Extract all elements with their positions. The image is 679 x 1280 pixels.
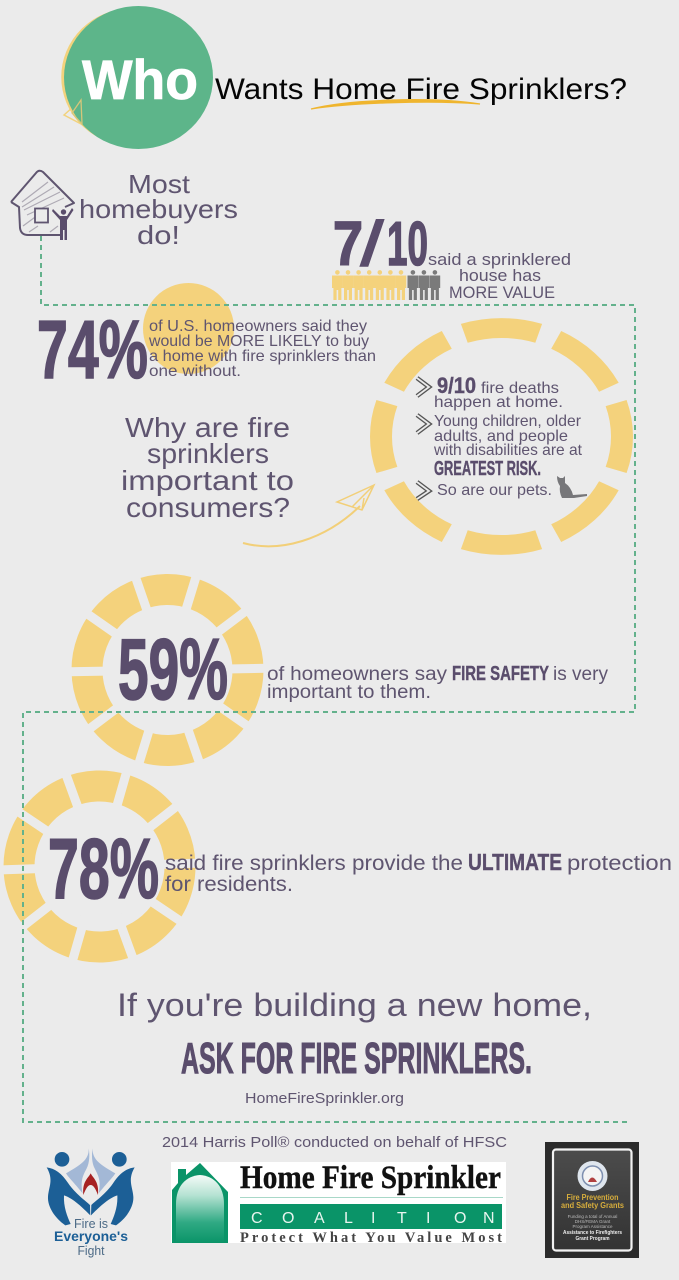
title accent shapes xyxy=(62,9,202,145)
icon: chevrons xyxy=(417,378,429,499)
text: more value: MORE VALUE xyxy=(449,283,555,302)
icon: cat xyxy=(557,476,587,498)
text: greatest risk: GREATEST RISK. xyxy=(434,458,541,480)
text: ultimate protection: protection xyxy=(567,852,672,875)
text: 74% description: of U.S. homeowners said they xyxy=(149,318,367,335)
heading: why are fire sprinklers important: important to xyxy=(121,465,294,496)
text: list copy: with disabilities are at xyxy=(433,442,583,459)
stat: 7/10: 10 xyxy=(387,210,428,279)
text: ultimate protection: said fire sprinklers provide the xyxy=(165,852,463,875)
stat: 9/10: 9/10 xyxy=(437,373,476,398)
heading: most homebuyers do: Most xyxy=(128,169,191,199)
text: 74% description: a home with fire sprinklers than xyxy=(149,348,376,365)
text: fire safety: FIRE SAFETY xyxy=(452,663,549,685)
stat: 74%: 74% xyxy=(37,303,148,396)
logo: grants plaque: Funding a total of Annual xyxy=(568,1214,617,1219)
logo: grants plaque: DHS/FEMA Grant xyxy=(575,1219,611,1224)
text: more value: said a sprinklered xyxy=(428,250,571,269)
stat: 59%: 59% xyxy=(118,622,228,718)
title xyxy=(62,6,627,149)
ring: top right xyxy=(381,328,622,545)
text: 74% description xyxy=(148,318,376,380)
logo: grants plaque: Assistance to Firefighters xyxy=(563,1230,622,1236)
text: list copy xyxy=(433,380,583,499)
text: fire safety: is very xyxy=(553,664,608,685)
heading: why are fire sprinklers important: Why are fire xyxy=(125,412,290,443)
logo: Home Fire Sprinkler Coalition: Protect What You Value Most xyxy=(240,1230,502,1246)
logo: grants plaque: Grant Program xyxy=(576,1236,610,1242)
heading: most homebuyers do: do! xyxy=(137,220,180,250)
icon: ten people xyxy=(332,270,440,300)
stat: 7/10 xyxy=(333,210,428,279)
stat: 78%: 78% xyxy=(48,822,159,917)
text: more value: house has xyxy=(459,266,541,285)
title green circle xyxy=(64,6,213,149)
logo: Fire is Everyone's Fight: Fight xyxy=(78,1243,105,1258)
logo: Fire is Everyone's Fight: Fire is xyxy=(74,1216,108,1231)
text: ultimate protection: for residents. xyxy=(165,873,293,896)
logo: Fire is Everyone's Fight: Everyone's xyxy=(54,1228,128,1244)
text: list copy: fire deaths xyxy=(481,380,559,397)
text: more value xyxy=(428,250,571,302)
heading: most homebuyers do: homebuyers xyxy=(79,194,238,224)
heading: why are fire sprinklers important xyxy=(121,412,294,523)
text: 74% description: one without. xyxy=(149,363,241,380)
text: ultimate protection xyxy=(165,849,672,896)
text: fire safety: important to them. xyxy=(267,682,431,703)
title word: Who: Who xyxy=(82,48,198,111)
text: fire safety: of homeowners say xyxy=(267,664,448,685)
heading: why are fire sprinklers important: consumers? xyxy=(126,492,290,523)
stat: 7/10: / xyxy=(361,210,384,279)
title swoosh xyxy=(311,100,480,109)
logo: grants plaque: and Safety Grants xyxy=(561,1201,625,1210)
text: 74% description: would be MORE LIKELY to buy xyxy=(148,333,369,350)
logo: Home Fire Sprinkler Coalition: COALITION xyxy=(251,1210,495,1227)
text: fire safety xyxy=(267,663,608,703)
title text: Wants Home Fire Sprinklers? xyxy=(215,73,627,106)
stat: 7/10: 7 xyxy=(333,210,363,279)
yellow circle behind 74% xyxy=(143,283,234,374)
logo: Home Fire Sprinkler Coalition xyxy=(171,1160,506,1246)
text: list copy: So are our pets. xyxy=(437,482,552,499)
text: ultimate protection: ULTIMATE xyxy=(468,849,562,875)
text: list copy: adults, and people xyxy=(434,428,568,445)
title triangle over circle xyxy=(72,100,82,124)
heading: most homebuyers do xyxy=(79,169,238,250)
text: list copy: Young children, older xyxy=(434,413,582,430)
call to action: HomeFireSprinkler.org xyxy=(245,1090,404,1107)
text: list copy: happen at home. xyxy=(434,394,563,411)
call to action xyxy=(117,987,592,1107)
logo: grants plaque xyxy=(545,1142,639,1258)
panel: risk list xyxy=(417,373,587,499)
ring: 78% xyxy=(0,770,201,963)
heading: why are fire sprinklers important: sprinklers xyxy=(147,438,269,469)
call to action: If you're building a new home, xyxy=(117,987,592,1023)
icon: house with person xyxy=(11,171,74,240)
logo: grants plaque: Fire Prevention xyxy=(566,1193,619,1202)
logo: Fire is Everyone's Fight xyxy=(47,1148,135,1258)
logo: grants plaque: Program Assistance xyxy=(572,1224,613,1229)
source note: 2014 Harris Poll® conducted on behalf of HFSC xyxy=(162,1134,507,1151)
logo: Home Fire Sprinkler Coalition: Home Fire Sprinkler xyxy=(240,1160,501,1196)
ring: 59% xyxy=(68,575,267,765)
arrow: paper plane xyxy=(243,485,374,546)
dashed connector line xyxy=(23,236,635,1122)
